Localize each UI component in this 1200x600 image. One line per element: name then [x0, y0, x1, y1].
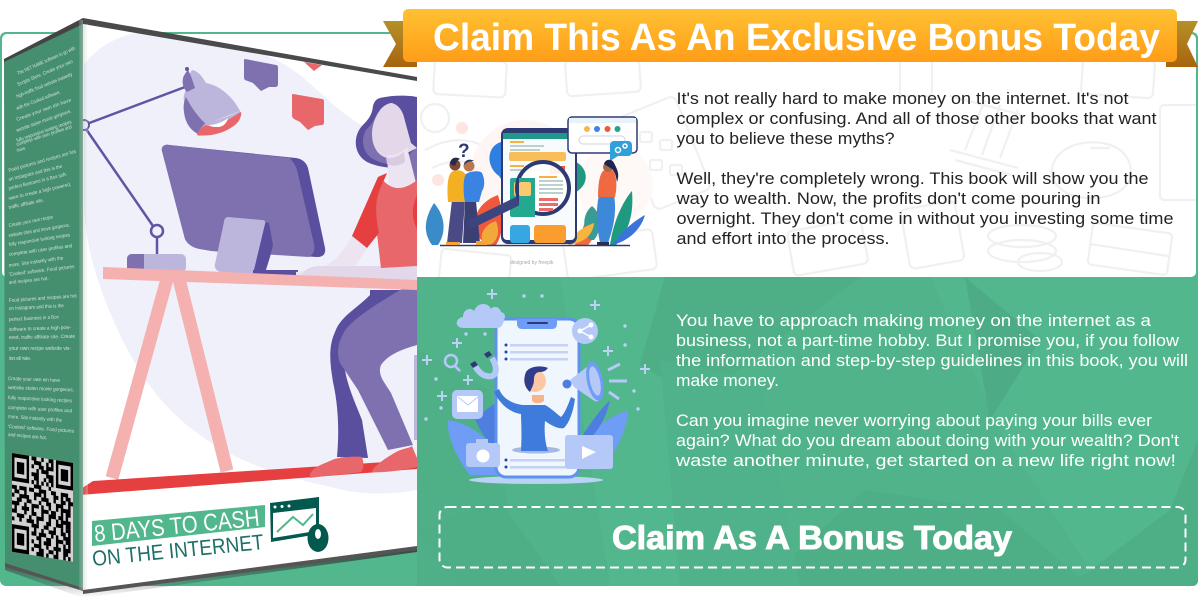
speech bubbles — [244, 59, 324, 130]
megaphone — [562, 360, 627, 402]
browser popup — [568, 117, 637, 161]
illustration: man in phone with megaphone — [422, 289, 650, 484]
man — [494, 366, 575, 454]
product box — [4, 15, 420, 598]
text block: promise: waste another minute, get started on a new life right now! — [675, 452, 1176, 470]
question mark: ? — [458, 141, 470, 162]
spine text: ered, traffic affiliate site. Create — [9, 334, 75, 341]
freepik credit: designed by freepik — [510, 260, 554, 266]
spine text: 'Cooked' software. Food pictures — [9, 264, 75, 278]
spine text: and recipes are hot. — [9, 276, 49, 286]
spine text: The NET NAME software to go with — [16, 46, 77, 77]
spine text: Create your own ein have — [8, 376, 60, 384]
illustration: people inspecting website with magnifier — [426, 117, 653, 266]
button: claim as a bonus: Claim As A Bonus Today — [612, 519, 1013, 556]
magnifying glass — [473, 162, 569, 223]
spine text: Food pictures and recipes are hot — [8, 149, 77, 174]
logo subtitle: ON THE INTERNET — [91, 530, 265, 571]
text block: intro: way to wealth. Now, the profits don't come pouring in — [675, 190, 1100, 208]
spine text: fully responsive looking recipes — [8, 395, 73, 404]
text block: promise: make money. — [676, 372, 779, 390]
text block: promise — [675, 312, 1188, 470]
spine text: Scripts Store. Create your own — [16, 59, 74, 88]
text block: intro — [675, 90, 1174, 248]
spine text: more. Site instantly with the — [8, 414, 62, 424]
spine text: more. Site instantly with the — [8, 255, 64, 269]
monitor — [162, 145, 325, 275]
title banner — [403, 9, 1177, 62]
text block: intro: It's not really hard to make money on the internet. It's not — [676, 90, 1129, 108]
spine text: 'Cooked' software. Food pictures — [8, 424, 75, 435]
text block: promise: the information and step-by-step guidelines in this book, you will — [676, 352, 1188, 370]
spine text: traffic affiliate site. — [8, 198, 45, 211]
text block: intro: you to believe these myths? — [676, 130, 894, 148]
spine text: perfect Business in a Box — [9, 314, 59, 323]
base and leaves — [469, 476, 603, 484]
phone — [496, 319, 579, 477]
logo ribbon — [91, 505, 265, 571]
spine text: fully responsive looking recipes — [16, 119, 73, 144]
woman with long hair — [597, 160, 618, 245]
cloud — [457, 304, 505, 328]
text block: intro: complex or confusing. And all of those other books that want — [676, 110, 1157, 128]
desk lamp — [79, 67, 241, 256]
logo ribbon: 8 DAYS TO CASH — [93, 505, 261, 548]
box bottom edge — [83, 546, 417, 594]
red floor bar — [73, 460, 417, 495]
spine text: on Instagram and this is the — [9, 303, 64, 312]
button: claim as a bonus — [440, 507, 1186, 568]
text block: intro: and effort into the process. — [676, 230, 890, 248]
spine text: high-traffic food website instantly — [16, 72, 74, 100]
mail icon — [452, 390, 483, 419]
spine text: website stolen movie gorgeous, — [16, 108, 72, 134]
spine text: itors will make. — [9, 356, 31, 362]
search icon — [445, 355, 460, 371]
two men — [446, 158, 487, 245]
text block: promise: business, not a part-time hobby. But I promise you, if you follow — [676, 332, 1179, 350]
spine text: website stolen movie gorgeous, — [8, 385, 74, 393]
text block: promise: again? What do you dream about doing with your wealth? Don't — [676, 432, 1179, 450]
spine text: your own recipe website vis- — [9, 346, 71, 352]
spine text: Food pictures and recipes are hot — [9, 293, 78, 304]
spine text: complete with user profiles and — [8, 243, 73, 258]
ribbon: left fold — [383, 21, 417, 67]
title: Claim This As An Exclusive Bonus Today — [433, 17, 1160, 59]
spine text: complete with user profiles and — [8, 405, 72, 414]
logo icon: browser chart and mouse — [270, 497, 328, 552]
spine text — [8, 46, 78, 441]
spine text: and recipes are hot. — [8, 432, 47, 441]
spine text: complete with user profiles and — [16, 124, 73, 148]
spine text: website sites and move gorgeous, — [8, 222, 70, 239]
spine text: more — [16, 146, 26, 154]
spine text: fully responsive looking recipes — [8, 232, 71, 248]
spine text: on Instagram and this is the — [8, 164, 63, 183]
ground line — [440, 244, 630, 246]
desk legs — [112, 279, 227, 478]
spine text: ware to create a high powered, — [8, 182, 72, 202]
spine text: software to create a high pow- — [9, 325, 71, 333]
panel: white upper content area — [2, 34, 1196, 277]
box front — [73, 15, 420, 595]
sparkles — [422, 289, 650, 421]
panel: green lower background facets — [417, 277, 1198, 586]
video icon — [565, 435, 613, 469]
box top edge — [83, 18, 417, 81]
spine text: Create your own recipe — [8, 214, 54, 229]
box spine — [4, 18, 84, 591]
text block: intro: Well, they're completely wrong. This book will show you the — [676, 170, 1148, 188]
spine text: with the Cooked software. — [16, 89, 62, 112]
text block: promise: You have to approach making money on the internet as a — [676, 312, 1152, 330]
spine text: Create your own ein have — [16, 97, 72, 123]
box shadow — [5, 548, 417, 598]
text block: intro: overnight. They don't come in without you investing some time — [676, 210, 1174, 228]
spine text: perfect Business in a Box soft- — [8, 172, 68, 192]
magnet — [470, 351, 496, 376]
shoes — [310, 457, 363, 478]
background blob — [84, 32, 417, 494]
watermark: finance line icons — [421, 55, 1200, 290]
desk top — [103, 267, 417, 290]
lamp base — [127, 254, 186, 272]
QR code — [12, 453, 73, 562]
camera icon — [466, 439, 500, 467]
text block: promise: Can you imagine never worrying about paying your bills ever — [676, 412, 1153, 430]
share icon — [572, 318, 598, 344]
tablet — [501, 128, 577, 244]
ribbon: right fold — [1166, 21, 1198, 67]
woman — [296, 96, 417, 458]
